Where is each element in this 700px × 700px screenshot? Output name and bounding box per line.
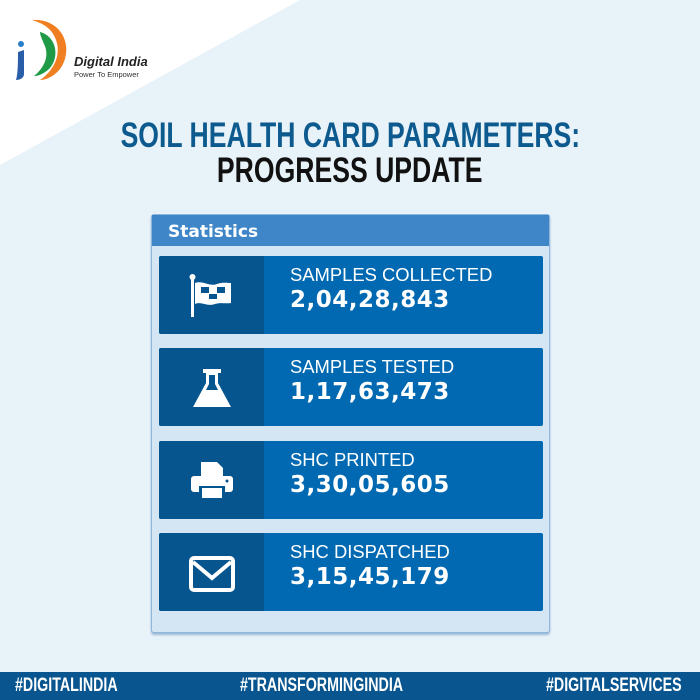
footer hashtags: #TRANSFORMINGINDIA bbox=[240, 675, 403, 696]
title: SOIL HEALTH CARD PARAMETERS: bbox=[120, 116, 580, 155]
panel: statistics bbox=[151, 214, 550, 633]
icon: flask bbox=[159, 348, 264, 426]
icon: printer bbox=[159, 441, 264, 519]
row: samples tested: 1,17,63,473 bbox=[290, 379, 450, 405]
panel header bbox=[152, 215, 549, 246]
footer hashtags: #DIGITALINDIA bbox=[15, 675, 118, 696]
footer hashtags: #DIGITALSERVICES bbox=[546, 675, 682, 696]
row: shc printed bbox=[159, 441, 543, 519]
icon: envelope bbox=[159, 533, 264, 611]
logo: Digital India: Digital India bbox=[74, 54, 148, 69]
row: shc printed: 3,30,05,605 bbox=[290, 472, 450, 498]
row: shc dispatched bbox=[159, 533, 543, 611]
row: samples collected bbox=[159, 256, 543, 334]
row: samples collected: SAMPLES COLLECTED bbox=[290, 264, 492, 285]
logo: Digital India: Power To Empower bbox=[74, 70, 139, 79]
footer hashtags bbox=[0, 672, 700, 700]
icon: flag bbox=[159, 256, 264, 334]
subtitle: PROGRESS UPDATE bbox=[217, 151, 483, 190]
logo: Digital India bbox=[16, 20, 148, 80]
panel header: Statistics bbox=[168, 222, 258, 242]
row: shc printed: SHC PRINTED bbox=[290, 449, 415, 470]
row: samples collected: 2,04,28,843 bbox=[290, 287, 450, 313]
row: samples tested: SAMPLES TESTED bbox=[290, 356, 454, 377]
row: samples tested bbox=[159, 348, 543, 426]
row: shc dispatched: SHC DISPATCHED bbox=[290, 541, 450, 562]
row: shc dispatched: 3,15,45,179 bbox=[290, 564, 450, 590]
